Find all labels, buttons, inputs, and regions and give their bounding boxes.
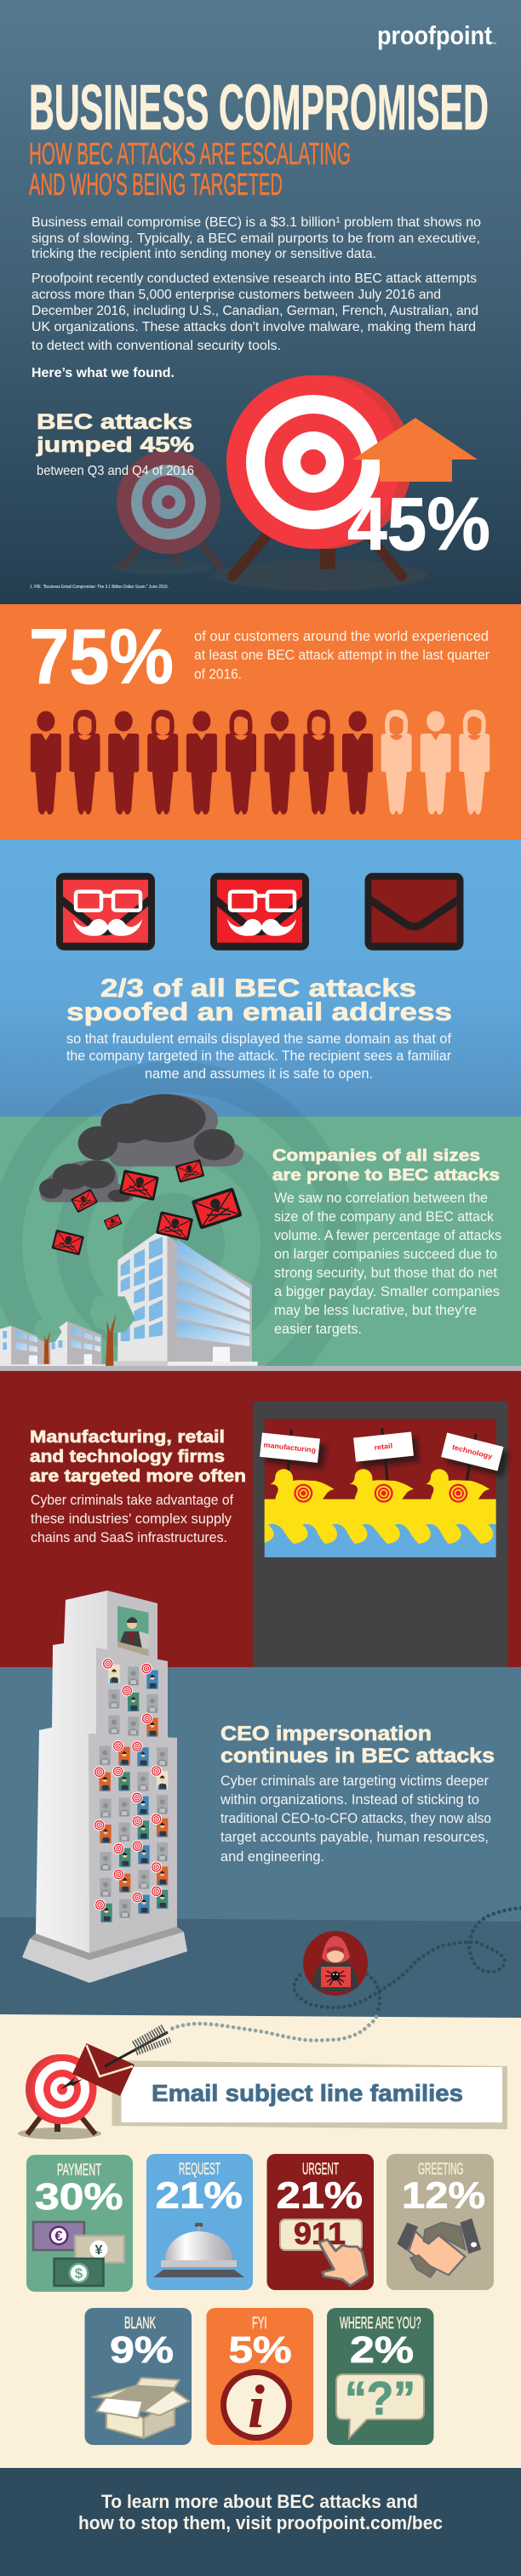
ducks xyxy=(270,1469,490,1503)
sign: retail: retail xyxy=(374,1442,393,1452)
sign: technology: technology xyxy=(451,1442,494,1460)
text: companies description: We saw no correlation between the xyxy=(274,1190,488,1206)
sticks xyxy=(288,1428,476,1480)
text: companies heading: Companies of all sizes xyxy=(272,1146,480,1165)
icon: info xyxy=(220,2369,292,2441)
icon: spider xyxy=(325,1971,346,1985)
dotted trail xyxy=(169,1908,521,2041)
sign: retail xyxy=(353,1431,414,1462)
text: companies description: on larger companies succeed due to xyxy=(274,1246,497,1262)
logo: proofpoint: TM xyxy=(491,41,496,45)
panel: spoofed background xyxy=(0,840,521,1117)
icon: handshake xyxy=(397,2219,481,2277)
icon: money: ¥ xyxy=(95,2243,103,2258)
icon: large target xyxy=(213,375,427,591)
small building right xyxy=(50,1322,101,1364)
icon: spoofed envelope 1 xyxy=(56,873,155,951)
intro text: December 2016, including U.S., Canadian, German, French, Australian, and xyxy=(31,304,478,318)
text: CEO description: within organizations. Instead of sticking to xyxy=(220,1791,479,1808)
stat: 75%: 75% xyxy=(29,614,174,700)
heading: 2/3 of attacks: spoofed an email address xyxy=(66,998,452,1026)
text: spoofed description: name and assumes it is safe to open. xyxy=(145,1065,373,1082)
small building left xyxy=(0,1326,53,1364)
text: call to action xyxy=(78,2491,443,2533)
concentric rings xyxy=(0,1061,357,1427)
intro text: to detect with conventional security tools. xyxy=(31,339,281,353)
text: call to action: how to stop them, visit proofpoint.com/bec xyxy=(78,2512,443,2533)
icon: spoofed envelope 2 xyxy=(210,873,309,951)
text: CEO description xyxy=(220,1773,491,1865)
sign shadows xyxy=(266,1437,509,1476)
icon: money: € xyxy=(54,2228,63,2244)
panel: footer call to action xyxy=(0,2468,521,2576)
text: companies description: easier targets. xyxy=(274,1321,362,1337)
callout: BEC attacks jumped 45%: jumped 45% xyxy=(36,433,194,457)
heading: industries: are targeted more often xyxy=(30,1467,246,1486)
intro text: tricking the recipient into sending money or sensitive data. xyxy=(31,247,376,261)
buildings and trees xyxy=(0,1232,521,1371)
intro text: across more than 5,000 enterprise customers between July 2016 and xyxy=(31,288,441,302)
card: FYI: 5% xyxy=(228,2329,292,2371)
arrow: up xyxy=(352,418,478,482)
tower base xyxy=(22,1927,187,1983)
heading: 2/3 of attacks xyxy=(66,974,452,1026)
text: companies description: may be less lucrative, but they're xyxy=(274,1302,477,1318)
text: 75 percent description xyxy=(194,628,490,683)
intro text: UK organizations. These attacks don't involve malware, making them hard xyxy=(31,320,476,334)
sign: manufacturing: manufacturing xyxy=(263,1440,317,1454)
water and waves xyxy=(265,1499,496,1544)
card: where are you xyxy=(327,2308,434,2445)
heading box: email subject line families xyxy=(112,2060,507,2129)
text: CEO description: and engineering. xyxy=(220,1848,324,1865)
icon: genuine envelope xyxy=(364,873,463,951)
card: FYI: FYI xyxy=(252,2315,267,2333)
card: payment: 30% xyxy=(35,2176,123,2218)
panel: spoofed email content xyxy=(56,873,463,1082)
text: companies description: a bigger payday. Smaller companies xyxy=(274,1283,500,1299)
text: 75 percent description: at least one BEC attack attempt in the last quarter xyxy=(194,647,490,663)
sign: technology xyxy=(441,1433,504,1471)
icon: 911 button xyxy=(280,2216,362,2251)
text: companies description: size of the company and BEC attack xyxy=(274,1208,494,1225)
panel: header background xyxy=(0,0,521,605)
big cloud xyxy=(78,1094,243,1167)
panel: CEO impersonation background xyxy=(0,1667,521,2019)
icon: malicious emails xyxy=(53,1160,241,1254)
text: industries description xyxy=(31,1492,233,1545)
callout: BEC attacks jumped 45%: BEC attacks xyxy=(37,410,192,434)
target markers xyxy=(94,1658,162,1911)
text: companies description: volume. A fewer percentage of attacks xyxy=(274,1227,501,1243)
text: call to action: To learn more about BEC attacks and xyxy=(101,2491,418,2512)
card: request: 21% xyxy=(156,2175,243,2216)
heading text: Email subject line families xyxy=(152,2080,463,2106)
ground xyxy=(0,1366,521,1371)
text: companies heading xyxy=(272,1146,500,1185)
icon: money xyxy=(33,2222,124,2286)
panel: companies of all sizes xyxy=(0,1061,521,1427)
intro text xyxy=(31,215,481,353)
CEO window xyxy=(117,1606,148,1656)
text: CEO description: traditional CEO-to-CFO attacks, they now also xyxy=(220,1810,491,1826)
text: companies heading: are prone to BEC attacks xyxy=(272,1166,500,1185)
card: greeting: 12% xyxy=(402,2175,485,2216)
text: CEO description: Cyber criminals are targeting victims deeper xyxy=(220,1773,489,1789)
small cloud xyxy=(39,1160,134,1202)
text: companies description xyxy=(274,1190,501,1337)
tree small xyxy=(33,1321,62,1364)
card: where are you: 2% xyxy=(350,2329,414,2371)
heading: CEO impersonation: continues in BEC attacks xyxy=(220,1745,495,1768)
heading: industries: and technology firms xyxy=(30,1448,225,1466)
text: companies description: strong security, but those that do net xyxy=(274,1265,497,1281)
icon: open box xyxy=(93,2378,189,2438)
card: urgent xyxy=(267,2154,374,2290)
illustration: office tower xyxy=(22,1591,187,1983)
panel: industries xyxy=(0,1371,521,1667)
card: where are you: WHERE ARE YOU? xyxy=(340,2315,421,2333)
main building xyxy=(0,1232,258,1366)
logo: proofpoint: proofpoint xyxy=(377,20,492,50)
card: urgent: URGENT xyxy=(302,2161,339,2179)
card: urgent: 21% xyxy=(277,2175,363,2216)
icon: 911 button: 911 xyxy=(294,2216,346,2251)
card: FYI xyxy=(206,2308,313,2445)
callout: BEC attacks jumped 45% xyxy=(36,410,194,478)
card: blank: 9% xyxy=(110,2329,174,2371)
text: industries description: these industries' complex supply xyxy=(31,1511,232,1527)
cream section background xyxy=(0,2014,521,2468)
text: industries description: Cyber criminals take advantage of xyxy=(31,1492,233,1508)
text: 75 percent description: of our customers around the world experienced xyxy=(194,628,489,644)
callout: BEC attacks jumped 45%: between Q3 and Q4 of 2016 xyxy=(37,464,194,478)
card: blank xyxy=(85,2308,192,2445)
icon row: people xyxy=(31,710,490,814)
intro text: Proofpoint recently conducted extensive research into BEC attack attempts xyxy=(31,271,477,286)
icon: money: $ xyxy=(75,2265,83,2282)
footnote: 1. FBI. “Business Email Compromise: The 3.1 Billion Dollar Scam.” June 2016. xyxy=(30,585,169,590)
tree large xyxy=(89,1296,135,1366)
icon: target with email and arrow xyxy=(18,2029,170,2139)
text: CEO description: target accounts payable, human resources, xyxy=(220,1829,489,1845)
sign: manufacturing xyxy=(260,1433,320,1463)
stat: 45%: 45% xyxy=(347,482,490,566)
intro text: signs of slowing. Typically, a BEC email purports to be from an executive, xyxy=(31,231,480,246)
icon: hacker xyxy=(303,1931,368,1996)
card: payment xyxy=(26,2155,133,2292)
heading: industries: Manufacturing, retail xyxy=(30,1428,225,1447)
employee windows xyxy=(100,1665,168,1922)
text: spoofed description xyxy=(66,1031,451,1082)
subtitle xyxy=(29,136,351,202)
lead-in: Here’s what we found. xyxy=(31,366,175,380)
shooting gallery panel xyxy=(253,1402,508,1667)
intro text: Business email compromise (BEC) is a $3.1 billion¹ problem that shows no xyxy=(31,215,481,230)
icon: small faded target xyxy=(111,450,220,574)
icon: pointing hand xyxy=(319,2240,367,2286)
text: spoofed description: so that fraudulent emails displayed the same domain as that of xyxy=(66,1031,451,1047)
heading: CEO impersonation xyxy=(220,1722,495,1768)
card: request: REQUEST xyxy=(179,2161,220,2179)
icon: info: i xyxy=(248,2373,265,2441)
subtitle: AND WHO’S BEING TARGETED xyxy=(29,167,283,202)
heading: industries xyxy=(30,1428,246,1486)
heading: CEO impersonation: CEO impersonation xyxy=(220,1722,432,1745)
heading: 2/3 of attacks: 2/3 of all BEC attacks xyxy=(100,974,416,1002)
card: request xyxy=(146,2154,253,2290)
panel: 75 percent xyxy=(0,604,521,841)
illustration: shooting gallery with ducks xyxy=(260,1419,509,1557)
text: 75 percent description: of 2016. xyxy=(194,665,242,683)
card: payment: PAYMENT xyxy=(57,2162,101,2179)
tower faces xyxy=(36,1591,111,1953)
icon: speech bubble xyxy=(336,2372,424,2438)
icon: speech bubble: “?” xyxy=(345,2372,415,2425)
card: greeting: GREETING xyxy=(418,2161,463,2179)
icon: service bell xyxy=(153,2223,244,2277)
text: industries description: chains and SaaS infrastructures. xyxy=(31,1529,227,1545)
card: greeting xyxy=(386,2154,494,2290)
clouds xyxy=(39,1094,243,1254)
text: spoofed description: the company targeted in the attack. The recipient sees a familiar xyxy=(66,1048,451,1064)
card: blank: BLANK xyxy=(124,2315,156,2333)
